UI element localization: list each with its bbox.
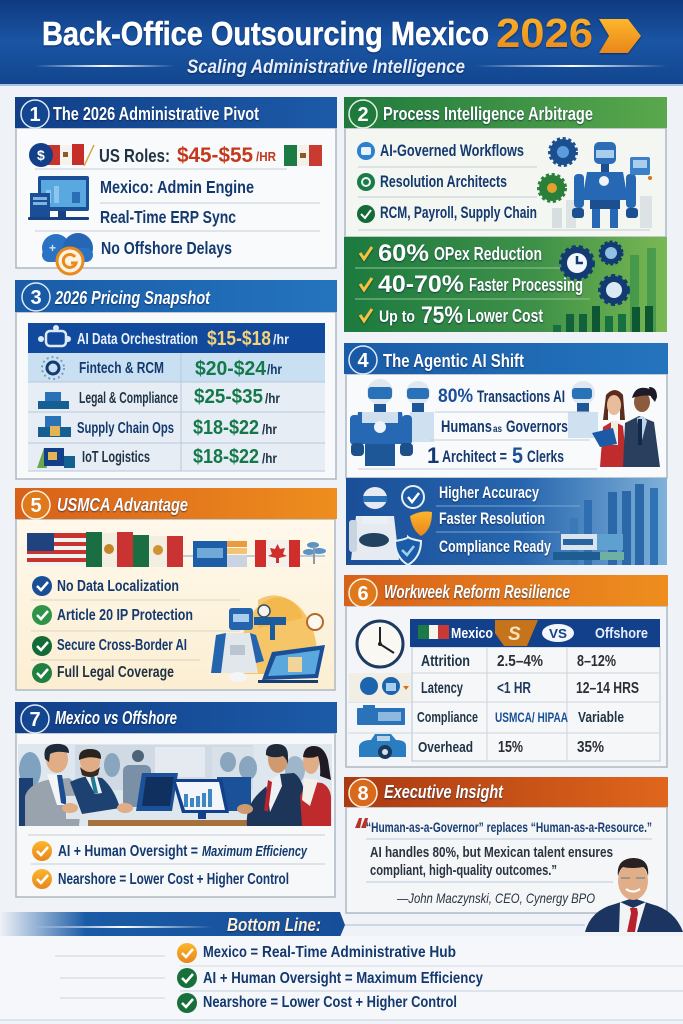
text: 1 Architect = 5 Clerks xyxy=(427,443,564,468)
item: AI + Human Oversight = Maximum Efficiency xyxy=(32,841,308,861)
row: Overhead: Overhead xyxy=(418,739,473,756)
text: 1 Architect = 5 Clerks: Architect = xyxy=(442,448,507,466)
item: AI-Governed Workflows xyxy=(357,142,524,160)
stat: Up to 75% Lower Cost: Up to xyxy=(379,307,415,326)
flag: Canada xyxy=(255,540,300,567)
US roles row: /HR xyxy=(256,149,277,164)
quote xyxy=(355,818,652,906)
panel 1: The 2026 Administrative Pivot: 1 xyxy=(30,104,41,126)
stat: Up to 75% Lower Cost: Lower Cost xyxy=(467,306,543,326)
icon: white robot xyxy=(349,487,399,560)
row: Fintech & RCM: Fintech & RCM xyxy=(79,360,164,377)
row: Latency: 12–14 HRS xyxy=(576,680,639,697)
icon: clock xyxy=(357,621,403,667)
header banner xyxy=(0,0,683,86)
icon: blue robot with gears xyxy=(539,139,652,228)
icon: monitor xyxy=(28,176,89,220)
blue benefits block: Faster Resolution xyxy=(439,510,545,528)
person: bearded man xyxy=(70,749,133,814)
text: 1 Architect = 5 Clerks: 5 xyxy=(512,443,523,468)
panel 4: The Agentic AI Shift: 4 xyxy=(358,350,370,372)
item: RCM, Payroll, Supply Chain: RCM, Payroll, Supply Chain xyxy=(380,204,537,222)
panel 8: Executive Insight: Executive Insight xyxy=(384,782,504,802)
row: Supply Chain Ops xyxy=(38,416,277,439)
row: IoT Logistics: IoT Logistics xyxy=(82,449,150,466)
text: Humans as Governors: Humans xyxy=(441,418,492,436)
text: Humans as Governors: as xyxy=(493,424,502,435)
panel 8: Executive Insight xyxy=(344,777,668,913)
row: Legal & Compliance: Legal & Compliance xyxy=(79,390,178,407)
icon: cloud with clock: + xyxy=(49,241,56,255)
row: Latency: Latency xyxy=(421,680,463,697)
table header: S xyxy=(508,624,521,645)
table header: VS xyxy=(549,626,567,641)
item: Nearshore lower cost: Nearshore = Lower Cost + Higher Control xyxy=(203,994,457,1011)
chart monitor xyxy=(172,779,229,819)
item: Nearshore lower cost xyxy=(177,993,457,1013)
panel 5: USMCA Advantage: 5 xyxy=(30,495,42,517)
row: IoT Logistics: /hr xyxy=(262,450,277,466)
row: Attrition: 2.5–4% xyxy=(497,653,543,670)
stat: 40-70% Faster Processing: Faster Processing xyxy=(469,275,583,295)
icon: robots xyxy=(350,379,598,466)
bar chart: green xyxy=(553,248,656,332)
row: Overhead: 35% xyxy=(577,739,604,756)
item: Secure Cross-Border AI xyxy=(32,636,187,656)
item: Resolution Architects xyxy=(357,173,507,191)
row: AI Data Orchestration: $15-$18 xyxy=(207,328,271,350)
row: Legal & Compliance xyxy=(38,386,280,409)
item: No Data Localization xyxy=(32,576,179,596)
text: Humans as Governors xyxy=(441,418,568,436)
US roles row: $45-$55 xyxy=(177,144,253,167)
blue benefits block xyxy=(346,478,667,565)
item: Secure Cross-Border AI: Secure Cross-Border AI xyxy=(57,637,187,654)
item: No Data Localization: No Data Localization xyxy=(57,578,179,595)
comparison table xyxy=(348,619,660,761)
item: Mexico real-time hub: Mexico = xyxy=(203,944,258,961)
item: Nearshore = Lower Cost + Higher Control: Nearshore = Lower Cost + Higher Control xyxy=(58,871,289,888)
icon: gears xyxy=(561,242,628,304)
panel 6: Workweek Reform Resilience: 6 xyxy=(358,583,369,605)
icon: robot at computer xyxy=(211,595,325,683)
row: Attrition: 8–12% xyxy=(577,653,616,670)
panel 4: The Agentic AI Shift xyxy=(344,343,668,565)
item: AI-Governed Workflows: AI-Governed Workflows xyxy=(380,142,524,160)
row: Fintech & RCM xyxy=(42,357,282,380)
icon: cloud with clock xyxy=(42,233,93,274)
row: Compliance: USMCA/ HIPAA xyxy=(495,709,568,725)
table header: Offshore xyxy=(595,625,648,642)
panel 1: The 2026 Administrative Pivot: The 2026 Administrative Pivot xyxy=(53,104,259,124)
US roles row: US Roles: xyxy=(99,145,170,166)
panel 1: The 2026 Administrative Pivot xyxy=(15,97,337,274)
person: left man in grey suit xyxy=(19,744,99,826)
stat: Up to 75% Lower Cost xyxy=(360,302,543,329)
bottom line banner xyxy=(0,912,345,937)
stat: 60% OPex Reduction: OPex Reduction xyxy=(434,244,542,264)
item: Mexico real-time hub xyxy=(177,943,456,963)
bar chart: blue xyxy=(553,484,658,565)
table xyxy=(88,820,273,826)
row: AI Data Orchestration: AI Data Orchestration xyxy=(77,331,198,348)
row: Attrition xyxy=(421,653,616,670)
row: Compliance: Compliance xyxy=(417,709,478,726)
panel 6: Workweek Reform Resilience xyxy=(344,575,668,767)
panel 4: The Agentic AI Shift: 80% xyxy=(438,386,473,407)
icon: orange shield xyxy=(410,512,432,536)
item: Mexico real-time hub: Real-Time Administrative Hub xyxy=(262,944,456,961)
row: Latency xyxy=(349,673,639,702)
panel 3: 2026 Pricing Snapshot xyxy=(15,280,337,479)
panel 6: Workweek Reform Resilience: Workweek Reform Resilience xyxy=(384,582,570,602)
row: Compliance xyxy=(357,705,624,726)
panel 4: The Agentic AI Shift: Transactions AI xyxy=(477,388,565,406)
flag: Mexico xyxy=(86,532,133,567)
portrait: John Maczynski xyxy=(585,858,683,932)
US roles row xyxy=(29,143,322,167)
row: Overhead xyxy=(359,734,604,759)
title xyxy=(42,10,641,56)
quote: AI handles 80%, but Mexican talent ensures xyxy=(370,845,613,861)
row: Overhead: 15% xyxy=(498,739,523,756)
icon: tree xyxy=(303,542,326,564)
row: IoT Logistics xyxy=(37,446,277,468)
panel 5: USMCA Advantage xyxy=(15,488,337,690)
item: AI + Human Oversight = Maximum Efficiency: AI + Human Oversight = xyxy=(58,843,198,860)
panel 1: The 2026 Administrative Pivot: Mexico: Admin Engine xyxy=(100,177,254,197)
office meeting scene xyxy=(18,744,332,826)
stat: 60% OPex Reduction xyxy=(360,240,542,267)
item: Full Legal Coverage: Full Legal Coverage xyxy=(57,664,174,681)
flags row xyxy=(27,532,326,567)
item: Nearshore = Lower Cost + Higher Control xyxy=(32,869,289,889)
row: AI Data Orchestration xyxy=(38,325,289,350)
panel 2: Process Intelligence Arbitrage: Process Intelligence Arbitrage xyxy=(383,104,593,124)
row: IoT Logistics: $18-$22 xyxy=(193,446,259,468)
row: AI Data Orchestration: /hr xyxy=(273,331,289,347)
item: Full Legal Coverage xyxy=(32,663,174,683)
blue benefits block: Compliance Ready xyxy=(439,538,552,556)
item: Article 20 IP Protection xyxy=(32,605,193,625)
item: Article 20 IP Protection: Article 20 IP Protection xyxy=(57,607,193,624)
row: Legal & Compliance: $25-$35 xyxy=(194,386,263,408)
person: woman in red xyxy=(300,746,331,826)
row: Supply Chain Ops: /hr xyxy=(262,421,277,437)
subtitle: Scaling Administrative Intelligence xyxy=(187,57,465,78)
table header xyxy=(410,619,660,647)
title: Back-Office Outsourcing Mexico xyxy=(42,15,489,52)
flag: United States xyxy=(27,533,86,566)
table header: Mexico xyxy=(451,625,493,642)
icon: check circle xyxy=(402,486,424,508)
item: AI + Human Oversight = Maximum Efficiency: Maximum Efficiency xyxy=(202,844,308,860)
panel 2: Process Intelligence Arbitrage xyxy=(344,97,667,332)
text: Humans as Governors: Governors xyxy=(506,418,568,436)
item: AI + human oversight xyxy=(177,968,483,988)
icon: two business people xyxy=(592,387,660,467)
quote: —John Maczynski, CEO, Cynergy BPO xyxy=(396,890,595,906)
panel 1: The 2026 Administrative Pivot: Real-Time ERP Sync xyxy=(100,207,236,227)
panel 7: Mexico vs Offshore xyxy=(15,702,337,897)
bottom line list xyxy=(0,936,683,1020)
flag: Mexico 2 xyxy=(133,535,183,567)
item: AI + human oversight: AI + Human Oversight = Maximum Efficiency xyxy=(203,970,483,987)
panel 8: Executive Insight: 8 xyxy=(358,783,369,805)
panel 3: 2026 Pricing Snapshot: 2026 Pricing Snapshot xyxy=(54,288,211,308)
stat: 60% OPex Reduction: 60% xyxy=(378,240,429,267)
panel 2: Process Intelligence Arbitrage: 2 xyxy=(358,104,369,126)
blue benefits block: Higher Accuracy xyxy=(439,484,540,502)
icon: data card xyxy=(193,541,247,567)
bottom line banner: Bottom Line: xyxy=(227,915,321,935)
row: Supply Chain Ops: $18-$22 xyxy=(193,417,259,439)
stat: 40-70% Faster Processing xyxy=(360,271,583,298)
panel 7: Mexico vs Offshore: Mexico vs Offshore xyxy=(55,708,177,728)
icon: compliance shield xyxy=(395,537,421,565)
monitors xyxy=(136,773,251,819)
stat: 40-70% Faster Processing: 40-70% xyxy=(378,271,464,298)
quote: compliant, high-quality outcomes.” xyxy=(370,863,557,879)
row: Fintech & RCM: /hr xyxy=(267,361,282,377)
item: RCM, Payroll, Supply Chain xyxy=(357,204,537,223)
green results block xyxy=(344,237,667,332)
pricing table xyxy=(28,323,325,471)
text: 1 Architect = 5 Clerks: 1 xyxy=(427,443,439,468)
panel 4: The Agentic AI Shift: The Agentic AI Shift xyxy=(383,351,524,371)
row: Attrition: Attrition xyxy=(421,653,470,670)
item: Resolution Architects: Resolution Architects xyxy=(380,173,507,191)
panel 1: The 2026 Administrative Pivot: No Offshore Delays xyxy=(101,238,232,258)
row: Fintech & RCM: $20-$24 xyxy=(195,358,267,380)
panel 5: USMCA Advantage: USMCA Advantage xyxy=(57,495,188,515)
stat: Up to 75% Lower Cost: 75% xyxy=(421,302,463,329)
row: Supply Chain Ops: Supply Chain Ops xyxy=(77,420,174,437)
text: 1 Architect = 5 Clerks: Clerks xyxy=(527,448,564,466)
panel 3: 2026 Pricing Snapshot: 3 xyxy=(30,287,42,309)
row: Latency: <1 HR xyxy=(497,680,531,697)
row: Compliance: Variable xyxy=(578,709,624,726)
person: man with red tie xyxy=(237,744,306,826)
row: Legal & Compliance: /hr xyxy=(265,390,280,406)
US roles row: $ xyxy=(37,147,45,163)
panel 7: Mexico vs Offshore: 7 xyxy=(30,709,41,731)
title: 2026 xyxy=(496,10,593,56)
